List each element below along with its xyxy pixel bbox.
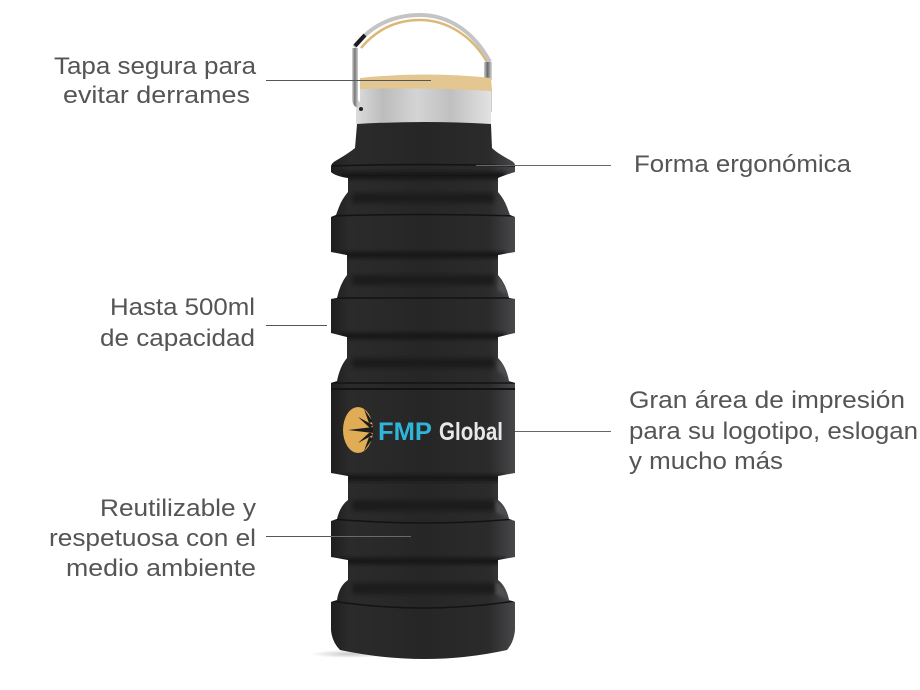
- callout: ergonomic shape: Forma ergonómica: [634, 151, 852, 178]
- callout: print area: y mucho más: [629, 448, 783, 475]
- handle: [354, 15, 491, 112]
- callout: reusable: Reutilizable y: [100, 495, 256, 522]
- callout: reusable: [49, 495, 256, 582]
- logo emblem: [343, 407, 373, 453]
- callout: capacity: de capacidad: [100, 325, 255, 352]
- silver collar: [356, 87, 491, 124]
- wooden lid: [360, 74, 492, 91]
- callout: secure lid: Tapa segura para: [54, 53, 257, 80]
- black silicone body: [331, 122, 516, 659]
- callout: secure lid: evitar derrames: [63, 82, 250, 109]
- callout: print area: [629, 387, 918, 475]
- callout: secure lid: [54, 53, 257, 109]
- callout: reusable: respetuosa con el: [49, 525, 256, 552]
- callout: print area: Gran área de impresión: [629, 387, 905, 414]
- bottle illustration: [310, 15, 530, 665]
- logo: FMP Global: Global: [439, 418, 503, 446]
- leader lines: [266, 80, 611, 536]
- callout: print area: para su logotipo, eslogan: [629, 418, 918, 445]
- callout: capacity: Hasta 500ml: [110, 294, 255, 321]
- body shading: [340, 172, 505, 594]
- logo: FMP Global: [343, 407, 503, 453]
- callout: capacity: [100, 294, 255, 352]
- callout: reusable: medio ambiente: [66, 555, 256, 582]
- floor shadow: [310, 650, 390, 658]
- logo wordmark: FMP: [378, 418, 432, 446]
